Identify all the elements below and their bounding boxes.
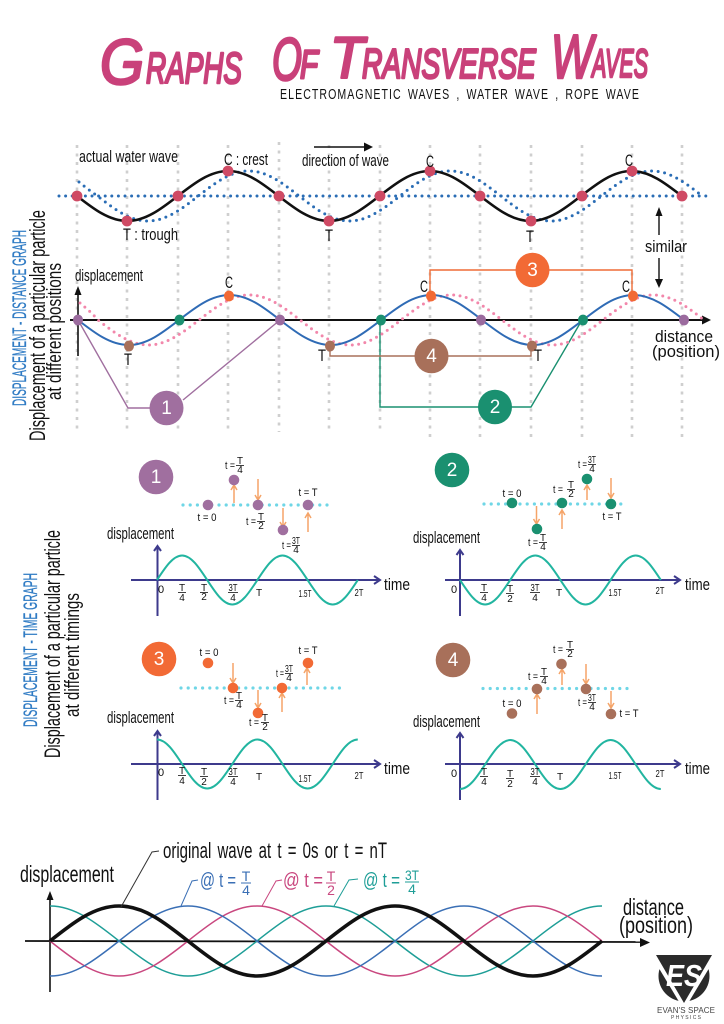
graph 1: T [179, 583, 185, 594]
title: RANSVERSE [362, 40, 537, 87]
wave labels: T [526, 228, 534, 246]
marker 2 [478, 390, 512, 424]
marker 1 [150, 391, 184, 425]
connector 1 [78, 320, 280, 408]
marker 4: 4 [426, 346, 437, 367]
motion diagram 2: t = [528, 537, 538, 549]
motion diagram 3: 2 [262, 722, 268, 733]
motion diagram 3: T [236, 691, 242, 702]
motion diagram 2: t = T [602, 511, 622, 523]
pink dotted wave [80, 295, 704, 345]
motion diagram 4: 4 [541, 676, 547, 687]
label: t = T/4: T [242, 868, 251, 884]
graph 3: 2T [354, 771, 364, 782]
motion diagram 2: 4 [540, 542, 546, 553]
graph 3: T [179, 766, 185, 777]
graph 1 [107, 525, 410, 616]
logo: Evan's Space Physics: PHYSICS [671, 1015, 702, 1021]
graph 4: 0 [451, 768, 457, 780]
label: t = 3T/4: 3T [405, 867, 419, 883]
labels: distance [623, 894, 684, 920]
graph 4 [413, 713, 710, 800]
panel: actual water wave [59, 142, 706, 246]
motion diagram 3: 4 [236, 700, 242, 711]
motion diagram 3: t = [224, 695, 234, 707]
heading: displacement-distance graph: Displacement of a particular particle [25, 210, 50, 441]
wave labels: T [325, 227, 333, 245]
wave: t = T/4 [50, 906, 602, 976]
label: t = 3T/4: 4 [408, 881, 416, 897]
motion diagram 2: t = [553, 484, 563, 496]
axis and point labels: distance [655, 328, 713, 346]
chart: displacement-distance graph [70, 267, 720, 369]
graph 4: displacement [413, 713, 480, 731]
label: t = T/2: @ t = [283, 870, 323, 892]
marker 1: 1 [161, 398, 172, 419]
graph 1: T [256, 588, 262, 599]
graph 1: 1.5T [298, 589, 312, 600]
graph 2: 4 [481, 593, 487, 604]
graph 1: 0 [158, 584, 164, 596]
wave labels: actual water wave [79, 148, 178, 166]
callout: similar [645, 207, 687, 288]
red particles [72, 166, 687, 226]
title: F [300, 43, 320, 87]
wave: t = T/2 [50, 906, 602, 976]
motion diagram 1: T [258, 512, 264, 523]
graph 2: T [556, 588, 562, 599]
graph 2: T [481, 583, 487, 594]
motion diagram 1 [183, 456, 328, 556]
graph 1: 4 [230, 593, 236, 604]
motion diagram 2: 2 [568, 489, 574, 500]
motion diagram 3: 3T [285, 664, 293, 675]
title: W [551, 23, 597, 92]
label: t = T/2: 2 [327, 882, 335, 898]
motion diagram 4: t = [528, 671, 538, 683]
graph 1: time [384, 576, 410, 594]
graph 1: 2T [354, 588, 364, 599]
logo: Evan's Space Physics: ES [666, 958, 702, 993]
title: G [100, 26, 144, 98]
graph 2: 0 [451, 584, 457, 596]
motion diagram 3: t = 0 [200, 647, 218, 659]
motion diagram 4: t = [578, 697, 587, 709]
badge 1: 1 [151, 467, 161, 488]
axes [25, 891, 650, 992]
axis and point labels: T [534, 347, 542, 365]
graph 3: T [201, 767, 207, 778]
connector 2 [380, 320, 582, 407]
wave: original [50, 906, 602, 976]
dotted rest line and shifted wave [59, 171, 706, 221]
heading: displacement-time graph: DISPLACEMENT - TIME GRAPH [21, 573, 42, 727]
graph 4: T [507, 769, 513, 780]
motion diagram 3: T [262, 713, 268, 724]
labels: original wave at t = 0s or t = nT [163, 838, 387, 863]
title [100, 23, 648, 98]
graph 2: 2T [656, 586, 664, 597]
motion diagram 4: t = T [620, 708, 639, 720]
marker 2: 2 [490, 397, 500, 418]
graph 4: 4 [532, 777, 538, 788]
graph 2: 1.5T [608, 588, 622, 599]
graph 1: 4 [179, 593, 185, 604]
label: t = T/2 [283, 868, 336, 898]
graph 3: T [256, 772, 262, 783]
leaders [121, 851, 358, 907]
graph 4: 2 [507, 779, 513, 790]
black wave [77, 171, 682, 221]
wave labels: direction of wave [302, 152, 389, 170]
badge 3 [142, 642, 176, 676]
motion diagram 1: 4 [293, 545, 299, 556]
wave labels: C [426, 153, 434, 171]
motion diagram 1: t = 0 [198, 512, 216, 524]
label: t = T/4: 4 [242, 882, 250, 898]
motion diagram 3: 4 [286, 673, 292, 684]
label: t = T/2: T [327, 868, 336, 884]
heading: displacement-time graph: at different timings [62, 593, 84, 717]
motion diagram 4: 4 [589, 702, 595, 713]
title: RAPHS [146, 44, 242, 93]
axis and point labels: C [225, 274, 233, 292]
wave labels: C [625, 152, 633, 170]
labels [20, 838, 693, 938]
marker 4 [414, 339, 448, 373]
motion diagram 4: 3T [588, 693, 596, 704]
connector 3 [430, 270, 632, 296]
panel: particle 2 [413, 453, 710, 616]
wave: t = 3T/4 [50, 906, 602, 976]
blue wave [78, 295, 684, 345]
label: t = 3T/4: @ t = [363, 870, 400, 892]
badge 2: 2 [447, 460, 457, 481]
panel: particle 3 [107, 642, 410, 800]
badge 4: 4 [448, 650, 459, 671]
wave labels: C : crest [224, 151, 268, 169]
motion diagram 1: T [237, 456, 243, 467]
graph 1: displacement [107, 525, 174, 543]
arrow: direction of wave [314, 142, 373, 152]
axis and point labels: T [318, 347, 326, 365]
graph 3: time [384, 760, 410, 778]
marker 3: 3 [527, 260, 538, 281]
motion diagram 4 [483, 640, 639, 720]
label: t = T/4: @ t = [200, 870, 236, 892]
motion diagram 2: T [568, 480, 574, 491]
graph 3: 1.5T [298, 774, 312, 785]
axes [70, 286, 711, 356]
label: t = 3T/4 [363, 867, 419, 897]
graph 3 [107, 709, 410, 800]
wave labels [79, 148, 633, 246]
heading: displacement-time graph [21, 530, 84, 758]
graph 2: 3T [530, 583, 540, 594]
graph 4: 3T [530, 767, 540, 778]
badge 2 [435, 453, 469, 487]
motion diagram 1: 2 [258, 521, 264, 532]
label: t = T/4 [200, 868, 251, 898]
motion diagram 3: t = [249, 717, 259, 729]
motion diagram 3 [181, 645, 342, 733]
logo: Evan's Space Physics: EVAN'S SPACE [657, 1006, 715, 1015]
heading: displacement-distance graph: DISPLACEMENT - DISTANCE GRAPH [10, 230, 31, 406]
graph 1: 2 [201, 592, 207, 603]
motion diagram 4: T [541, 667, 547, 678]
graph 2: 4 [532, 593, 538, 604]
graph 4: 2T [656, 769, 664, 780]
motion diagram 2 [484, 455, 624, 553]
graph 2: T [507, 584, 513, 595]
graph 4: T [481, 767, 487, 778]
axis and point labels: C [622, 278, 630, 296]
motion diagram 3: t = T [298, 645, 318, 657]
motion diagram 4: 2 [567, 649, 573, 660]
axis and point labels [75, 267, 720, 369]
motion diagram 1: t = [282, 540, 291, 552]
chart: wave at different times [20, 838, 693, 992]
graph 4: 4 [481, 777, 487, 788]
graph 3: 4 [179, 776, 185, 787]
graph 2: 2 [507, 594, 513, 605]
callout: similar: similar [645, 238, 687, 256]
graph 4: time [685, 760, 710, 778]
axis and point labels: (position) [652, 343, 720, 361]
graph 4: T [557, 772, 563, 783]
axis and point labels: C [420, 278, 428, 296]
graph 1: 3T [228, 583, 238, 594]
labels: (position) [619, 912, 693, 938]
title: O [272, 26, 302, 93]
graph 2 [413, 529, 710, 616]
graph 3: 2 [201, 777, 207, 788]
logo: Evan's Space Physics [648, 950, 720, 1021]
title: T [330, 26, 367, 91]
graph 3: 3T [228, 767, 238, 778]
axis and point labels: T [124, 351, 132, 369]
motion diagram 1: t = [225, 460, 235, 472]
motion diagram 2: 3T [588, 455, 596, 466]
graph 3: displacement [107, 709, 174, 727]
graph 3: 0 [158, 767, 164, 779]
graph 3: 4 [230, 777, 236, 788]
motion diagram 1: 3T [292, 536, 300, 547]
particles [73, 291, 689, 351]
motion diagram 2: T [540, 533, 546, 544]
axis and point labels: displacement [75, 267, 143, 285]
connector 4 [330, 346, 531, 356]
labels: displacement [20, 861, 114, 887]
badge 3: 3 [154, 649, 164, 670]
marker 3 [516, 253, 550, 287]
panel: particle 1 [107, 456, 410, 616]
wave labels: T : trough [123, 226, 178, 244]
motion diagram 4: T [567, 640, 573, 651]
panel: particle 4 [413, 640, 710, 800]
graph 2: displacement [413, 529, 480, 547]
graph 4: 1.5T [608, 771, 622, 782]
motion diagram 1: t = T [298, 487, 318, 499]
motion diagram 2: 4 [589, 464, 595, 475]
badge 4 [436, 643, 470, 677]
badge 1 [139, 460, 173, 494]
motion diagram 1: t = [246, 516, 256, 528]
graph 2: time [685, 576, 710, 594]
motion diagram 4: t = 0 [502, 698, 522, 710]
title: AVES [591, 42, 648, 86]
motion diagram 2: t = [578, 459, 587, 471]
motion diagram 3: t = [276, 668, 284, 680]
motion diagram 1: 4 [237, 465, 243, 476]
heading: displacement-distance graph: at different positions [44, 263, 66, 400]
motion diagram 4: t = [553, 644, 563, 656]
graph 1: T [201, 583, 207, 594]
heading: displacement-time graph: Displacement of a particular particle [40, 530, 65, 758]
heading: displacement-distance graph [10, 210, 66, 441]
motion diagram 2: t = 0 [502, 488, 522, 500]
